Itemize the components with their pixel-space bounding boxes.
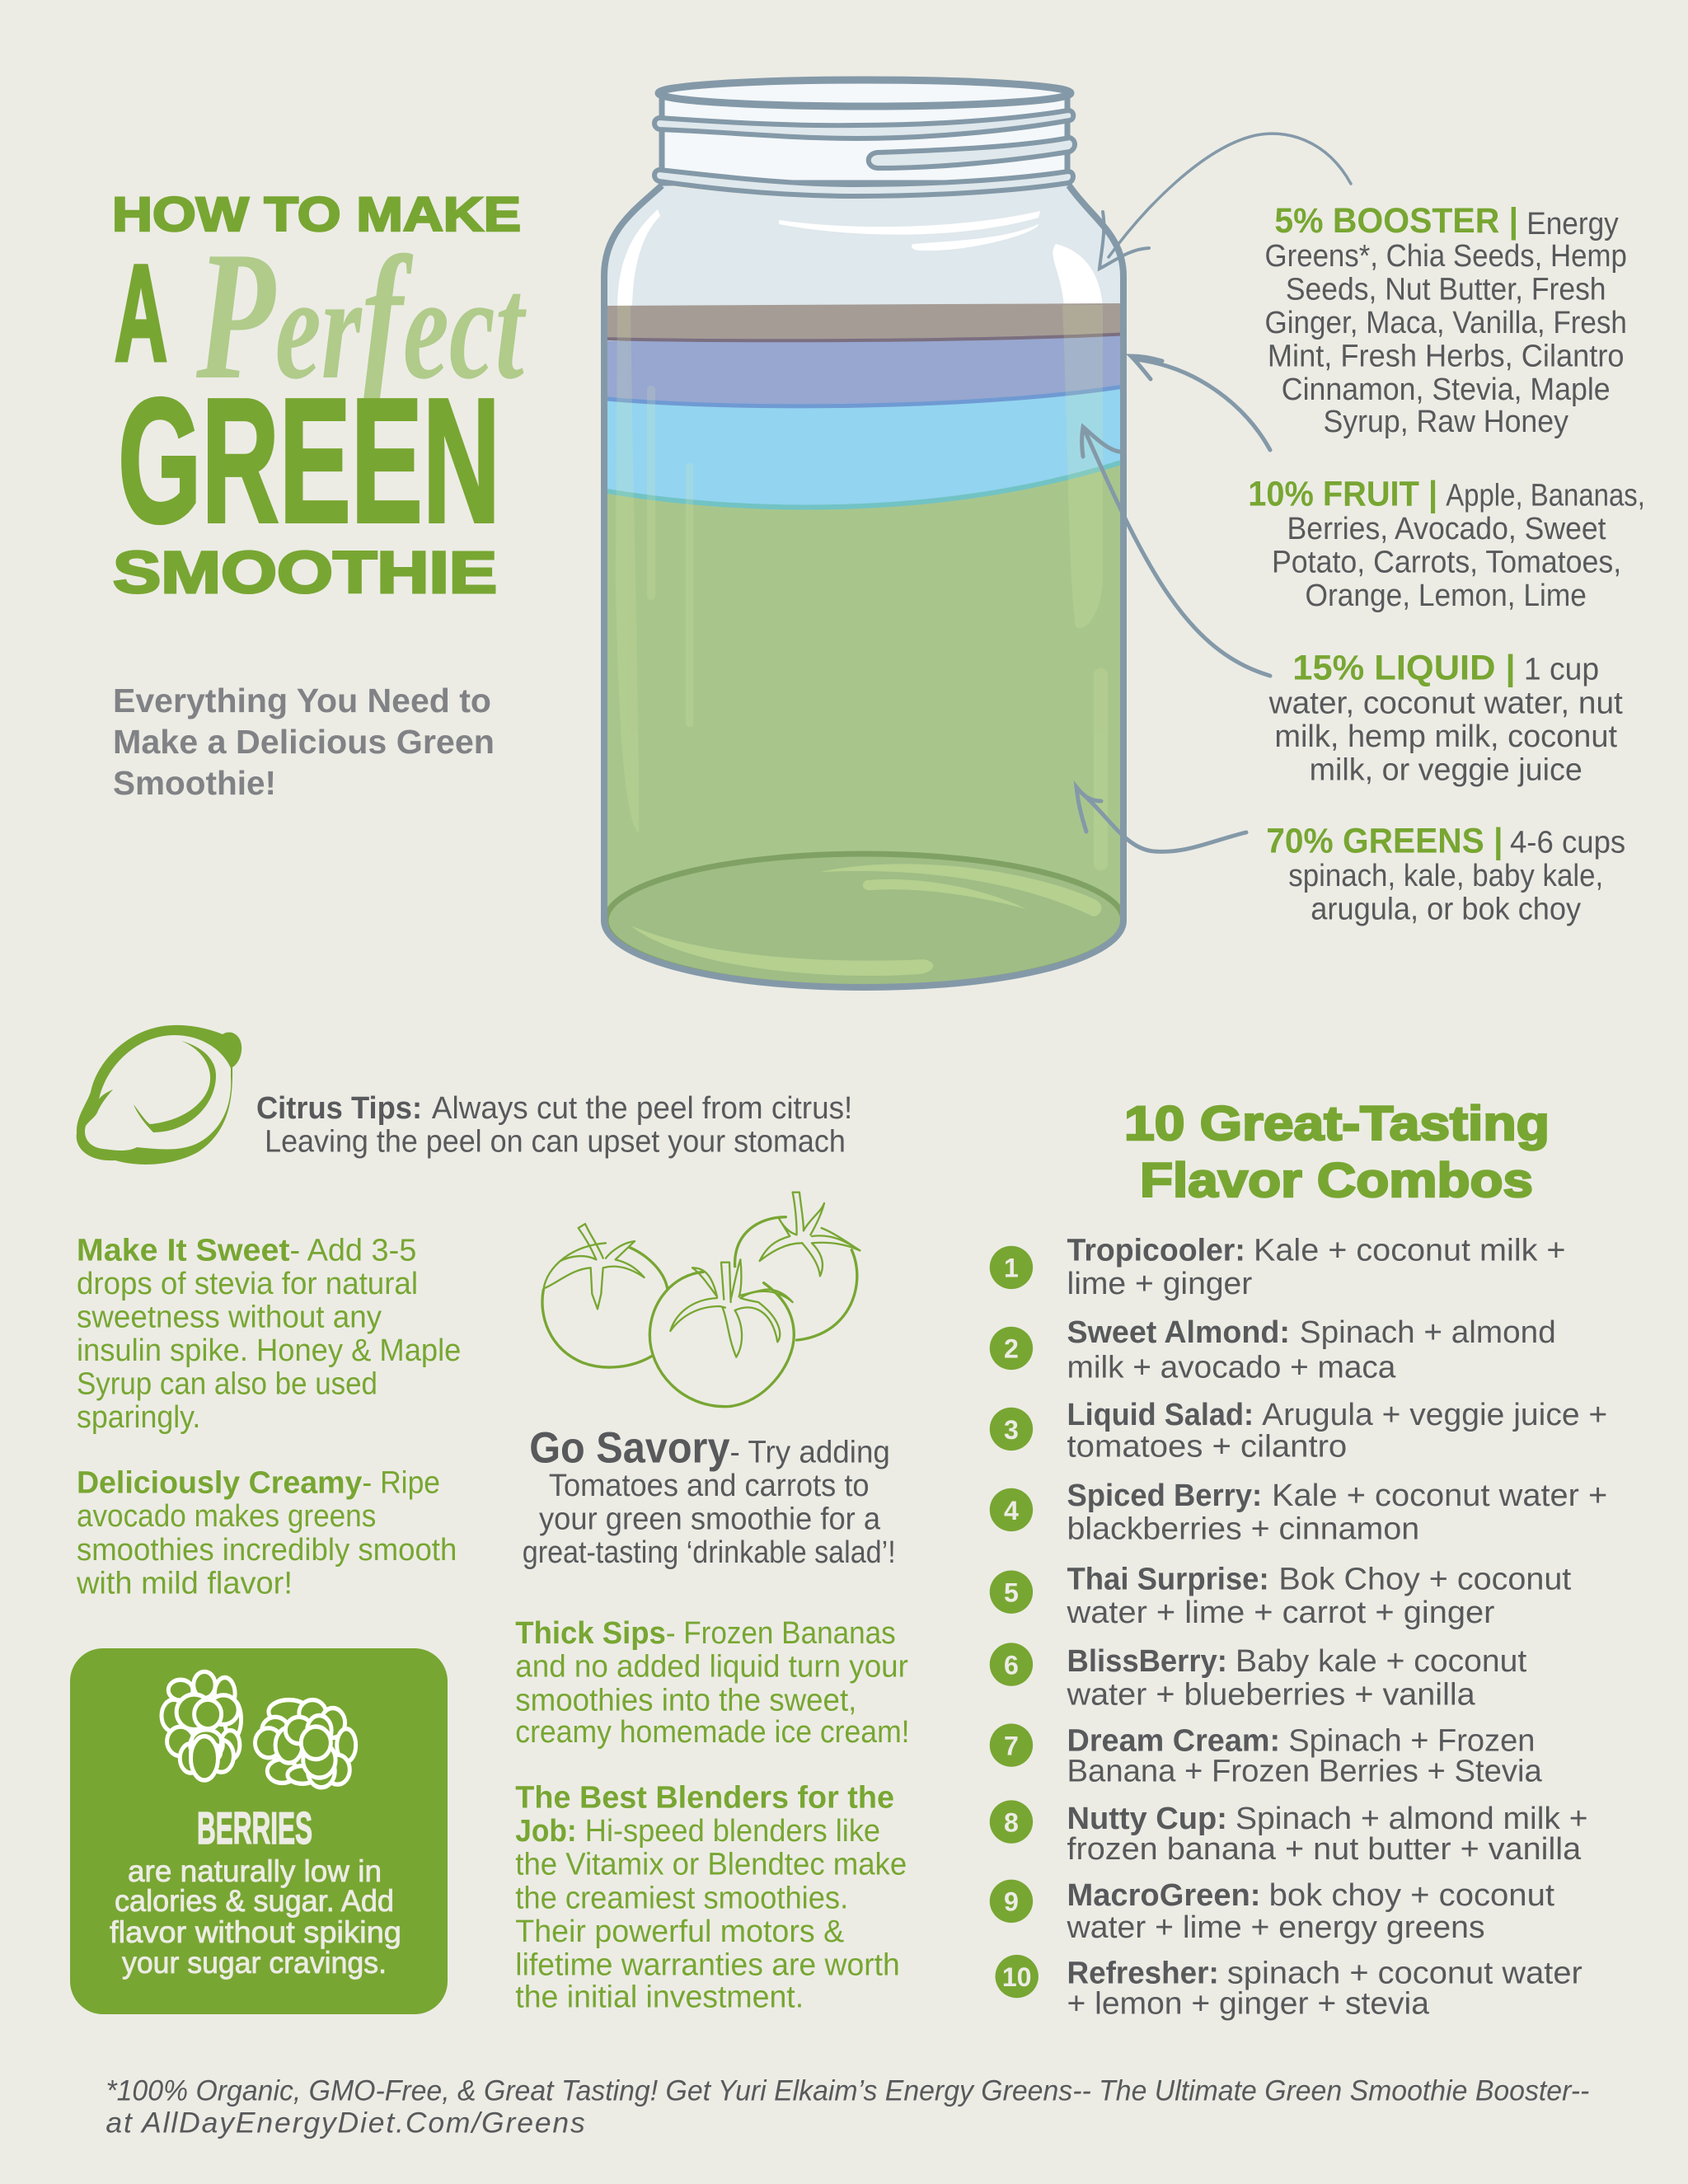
combo 6: BlissBerry: — [1067, 1644, 1227, 1679]
callout: liquid: 15% LIQUID | — [1292, 649, 1516, 688]
callout: fruit — [1248, 474, 1645, 613]
combo 2: Spinach + almond — [1300, 1315, 1556, 1350]
tip: go savory: Go Savory — [529, 1424, 730, 1472]
tip: deliciously creamy: - Ripe — [362, 1466, 440, 1501]
arrow: booster — [1100, 134, 1351, 269]
tip: make it sweet: sparingly. — [77, 1400, 200, 1435]
callout: liquid: water, coconut water, nut — [1268, 686, 1623, 720]
jar neck — [662, 93, 1067, 183]
tip: best blenders: lifetime warranties are worth — [515, 1947, 900, 1982]
combo 1: lime + ginger — [1067, 1267, 1253, 1301]
title line: smoothie: SMOOTHIE — [113, 541, 497, 606]
footer note — [106, 2074, 1589, 2139]
combo 9: water + lime + energy greens — [1067, 1910, 1485, 1945]
combo 6 — [990, 1643, 1527, 1713]
footer note: *100% Organic, GMO-Free, & Great Tasting! Get Yuri Elkaim’s Energy Greens-- The Ultimate Green Smoothie Booster-- — [106, 2074, 1589, 2107]
subtitle: Everything You Need to — [113, 682, 491, 719]
tip: deliciously creamy — [76, 1466, 457, 1601]
combo 8: Spinach + almond milk + — [1236, 1802, 1588, 1836]
subtitle — [113, 682, 495, 802]
callout: fruit: 10% FRUIT | — [1248, 474, 1437, 513]
tip: best blenders — [515, 1781, 907, 2014]
icon: raspberry left — [162, 1671, 241, 1780]
combo 8: Nutty Cup: — [1067, 1802, 1227, 1836]
combo 8: 8 — [1004, 1807, 1019, 1837]
arrow: fruit — [1131, 356, 1270, 450]
combo 10: spinach + coconut water — [1227, 1957, 1582, 1991]
collar — [654, 170, 1073, 196]
combo 10 — [996, 1955, 1582, 2022]
combo 7: Spinach + Frozen — [1288, 1723, 1535, 1758]
combo 9: bok choy + coconut — [1269, 1878, 1554, 1913]
tip: make it sweet: drops of stevia for natural — [77, 1267, 418, 1301]
callout: fruit: Berries, Avocado, Sweet — [1287, 512, 1606, 546]
berries text: flavor without spiking — [110, 1915, 401, 1949]
tip: deliciously creamy: Deliciously Creamy — [77, 1466, 362, 1501]
combo 6: water + blueberries + vanilla — [1066, 1678, 1476, 1713]
callout: booster: 5% BOOSTER | — [1274, 201, 1518, 241]
berries text: calories & sugar. Add — [115, 1884, 394, 1918]
callout: fruit: Apple, Bananas, — [1446, 478, 1645, 513]
combo 4 — [990, 1479, 1607, 1546]
tip: make it sweet: Make It Sweet — [77, 1233, 290, 1268]
tip: thick sips — [515, 1616, 910, 1750]
tip: best blenders: The Best Blenders for the — [515, 1781, 894, 1816]
berries label: BERRIES — [197, 1802, 312, 1854]
flavor combos list — [990, 1233, 1607, 2022]
callout: booster: Mint, Fresh Herbs, Cilantro — [1268, 339, 1625, 373]
tomato: left — [542, 1224, 668, 1367]
tip: deliciously creamy: avocado makes greens — [77, 1499, 376, 1534]
lower thread — [869, 138, 1075, 168]
tip: thick sips: smoothies into the sweet, — [515, 1683, 856, 1718]
combo 4: 4 — [1004, 1496, 1019, 1526]
combo 4: Spiced Berry: — [1067, 1479, 1262, 1513]
callout: liquid: milk, or veggie juice — [1310, 752, 1582, 787]
title line: green: GREEN — [118, 361, 500, 560]
combo 5: water + lime + carrot + ginger — [1066, 1596, 1495, 1630]
combo 3: tomatoes + cilantro — [1067, 1430, 1347, 1465]
combo 3: 3 — [1004, 1415, 1019, 1445]
subtitle: Make a Delicious Green — [113, 723, 495, 761]
jar floor — [606, 854, 1123, 987]
arrow: liquid — [1081, 427, 1270, 676]
combo 10: Refresher: — [1067, 1957, 1219, 1991]
white glass highlights — [617, 209, 1103, 307]
tip: go savory — [523, 1424, 896, 1570]
combo 5 — [990, 1562, 1572, 1630]
jar illustration — [593, 80, 1137, 997]
combo 8 — [990, 1800, 1588, 1867]
callout: greens: 4-6 cups — [1510, 825, 1625, 860]
tip: make it sweet: Syrup can also be used — [77, 1367, 377, 1402]
icon: citrus — [77, 1025, 241, 1165]
tip: make it sweet: sweetness without any — [77, 1301, 382, 1335]
combo 3: Liquid Salad: — [1067, 1398, 1254, 1432]
callout: liquid — [1268, 649, 1623, 787]
combo 5: Bok Choy + coconut — [1278, 1562, 1572, 1596]
tip: best blenders: the initial investment. — [515, 1980, 804, 2014]
citrus tips text: Always cut the peel from citrus! — [432, 1091, 852, 1126]
callout: booster: Cinnamon, Stevia, Maple — [1282, 373, 1611, 407]
combo 7: 7 — [1004, 1731, 1019, 1760]
callout: liquid: milk, hemp milk, coconut — [1274, 719, 1618, 754]
liquid layer — [598, 386, 1129, 508]
tip: go savory: Tomatoes and carrots to — [549, 1469, 870, 1503]
callout: booster: Greens*, Chia Seeds, Hemp — [1265, 239, 1627, 274]
combo 3 — [990, 1398, 1607, 1465]
tip: make it sweet — [77, 1233, 461, 1435]
callout: greens: spinach, kale, baby kale, — [1288, 859, 1603, 893]
tip: thick sips: creamy homemade ice cream! — [515, 1715, 910, 1750]
callout: greens: 70% GREENS | — [1266, 821, 1503, 860]
combo 9 — [990, 1878, 1554, 1945]
jar contents — [593, 173, 1137, 997]
berries text: are naturally low in — [128, 1854, 382, 1888]
footer note: at AllDayEnergyDiet.Com/Greens — [106, 2106, 585, 2139]
callout: liquid: 1 cup — [1524, 653, 1599, 687]
citrus tips text: Citrus Tips: — [256, 1091, 422, 1126]
callout: greens: arugula, or bok choy — [1311, 892, 1581, 926]
tip: deliciously creamy: with mild flavor! — [76, 1566, 293, 1601]
heading: flavor combos — [1124, 1097, 1550, 1207]
booster layer — [598, 303, 1129, 340]
heading: flavor combos: 10 Great-Tasting — [1124, 1097, 1550, 1151]
tip: best blenders: Job: — [515, 1814, 577, 1849]
callout: booster: Seeds, Nut Butter, Fresh — [1286, 272, 1606, 307]
combo 5: Thai Surprise: — [1067, 1562, 1269, 1596]
tip: thick sips: Thick Sips — [515, 1616, 666, 1651]
tip: go savory: your green smoothie for a — [539, 1502, 881, 1537]
tip: deliciously creamy: smoothies incredibly smooth — [77, 1533, 457, 1568]
upper thread — [654, 110, 1073, 138]
combo 10: + lemon + ginger + stevia — [1067, 1987, 1430, 2022]
combo 7: Banana + Frozen Berries + Stevia — [1067, 1755, 1543, 1789]
callout: booster: Ginger, Maca, Vanilla, Fresh — [1265, 306, 1627, 340]
combo 2 — [990, 1315, 1556, 1385]
combo 7 — [990, 1723, 1543, 1789]
callout: booster: Energy — [1526, 207, 1619, 241]
greens layer — [607, 465, 1120, 907]
combo 6: Baby kale + coconut — [1236, 1644, 1527, 1679]
citrus tips text: Leaving the peel on can upset your stomach — [265, 1125, 846, 1160]
tip: best blenders: Their powerful motors & — [515, 1915, 844, 1949]
combo 1: Tropicooler: — [1067, 1233, 1245, 1268]
combo 9: 9 — [1004, 1887, 1019, 1917]
berries text: your sugar cravings. — [122, 1946, 387, 1980]
title script word: Perfect: Perfect — [195, 213, 528, 418]
combo 4: blackberries + cinnamon — [1067, 1511, 1419, 1546]
combo 8: frozen banana + nut butter + vanilla — [1067, 1832, 1582, 1867]
combo 1: Kale + coconut milk + — [1254, 1233, 1566, 1268]
tip: go savory: great-tasting ‘drinkable salad’! — [523, 1535, 896, 1570]
title line: how to make: HOW TO MAKE — [112, 188, 521, 241]
callout: greens — [1266, 821, 1625, 926]
tip: best blenders: Hi-speed blenders like — [585, 1814, 880, 1849]
fruit layer — [598, 334, 1129, 406]
tomato: front — [649, 1259, 794, 1407]
combo 9: MacroGreen: — [1067, 1878, 1260, 1913]
heading: flavor combos: Flavor Combos — [1140, 1154, 1533, 1207]
combo 1: 1 — [1004, 1254, 1019, 1283]
combo 1 — [990, 1233, 1566, 1301]
combo 2: Sweet Almond: — [1067, 1315, 1290, 1350]
title — [112, 188, 528, 606]
tip: make it sweet: - Add 3-5 — [290, 1233, 416, 1268]
callout: booster: Syrup, Raw Honey — [1323, 405, 1568, 439]
arrow: greens — [1076, 787, 1246, 851]
top rim — [659, 80, 1071, 106]
callout: booster — [1265, 201, 1627, 439]
combo 7: Dream Cream: — [1067, 1723, 1280, 1758]
combo 2: 2 — [1004, 1334, 1019, 1364]
callout: fruit: Potato, Carrots, Tomatoes, — [1272, 546, 1621, 580]
tip: go savory: - Try adding — [730, 1435, 890, 1469]
citrus tips text — [256, 1091, 852, 1160]
berries text — [110, 1854, 401, 1980]
vertical glass reflections — [616, 305, 1108, 870]
icon: raspberry right — [256, 1700, 356, 1788]
combo 4: Kale + coconut water + — [1272, 1479, 1607, 1513]
floor highlights — [631, 864, 1101, 976]
combo 10: 10 — [1002, 1962, 1032, 1992]
combo 2: milk + avocado + maca — [1067, 1350, 1396, 1385]
subtitle: Smoothie! — [113, 764, 276, 802]
title letter: A: A — [115, 237, 167, 390]
tip: best blenders: the Vitamix or Blendtec make — [515, 1848, 907, 1882]
combo 3: Arugula + veggie juice + — [1262, 1398, 1607, 1432]
icon: tomatoes — [542, 1193, 860, 1407]
jar outline — [604, 185, 1123, 987]
tip: thick sips: and no added liquid turn your — [515, 1650, 908, 1685]
combo 6: 6 — [1004, 1650, 1019, 1680]
callout: fruit: Orange, Lemon, Lime — [1306, 579, 1587, 613]
tip: best blenders: the creamiest smoothies. — [515, 1881, 848, 1915]
tomato: right — [735, 1193, 860, 1340]
tip: make it sweet: insulin spike. Honey & Maple — [77, 1333, 461, 1368]
panel: berries — [70, 1648, 448, 2014]
combo 5: 5 — [1004, 1578, 1019, 1608]
tip: thick sips: - Frozen Bananas — [666, 1616, 896, 1651]
